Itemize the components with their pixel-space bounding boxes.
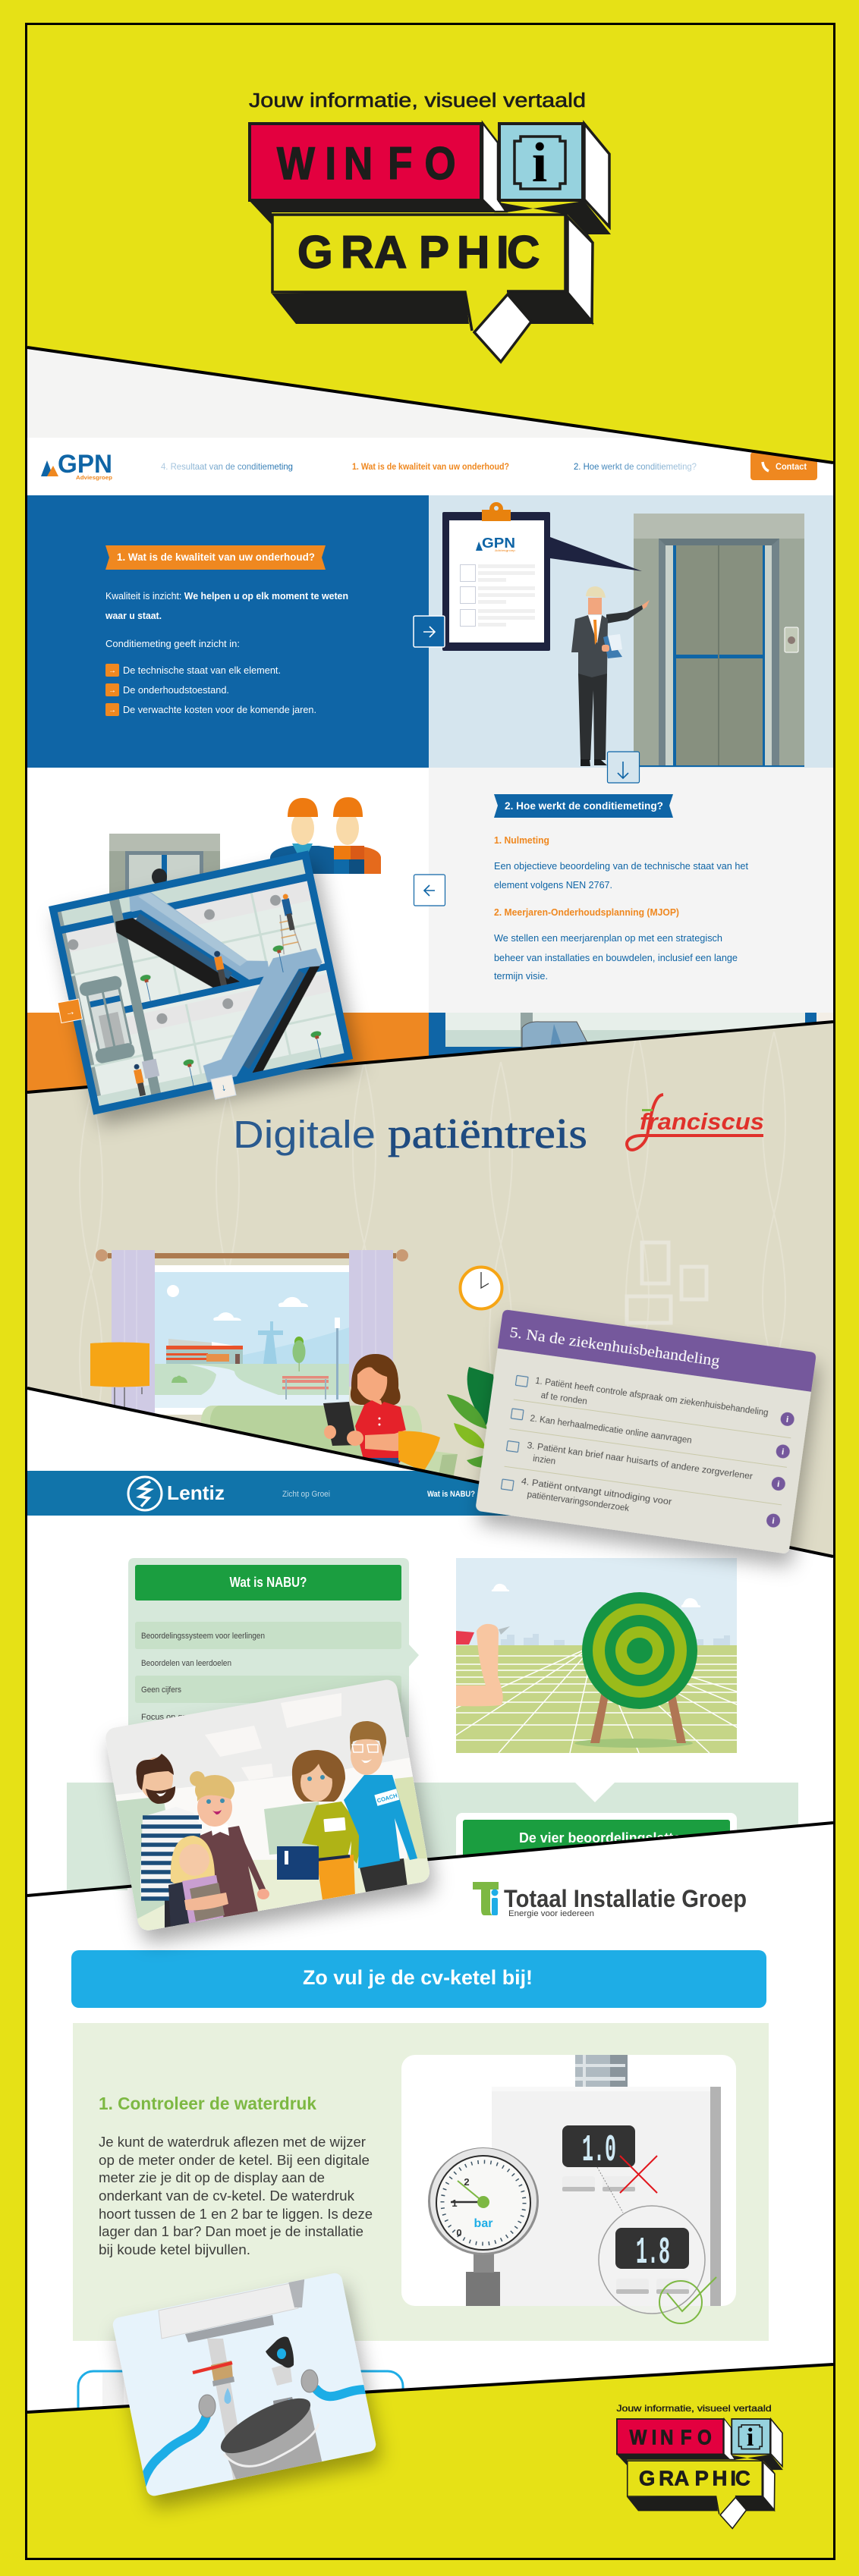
- wallpaper pattern: [80, 1032, 785, 1441]
- small lift: [109, 834, 220, 894]
- target: [582, 1592, 697, 1743]
- escalator one: [109, 870, 271, 1005]
- intro text: Kwaliteit is inzicht: We helpen u op elk moment te weten: [105, 591, 348, 602]
- potted plants: [140, 941, 326, 1092]
- wall clock: [460, 1267, 502, 1309]
- hallway background: [104, 1693, 448, 1942]
- arrow button: left: [414, 875, 445, 906]
- lamp post: [335, 1318, 340, 1400]
- card tab: orange arrow: →: [65, 1005, 76, 1018]
- Lentiz nav bar: Wat is NABU?: [427, 1490, 475, 1499]
- title: [237, 1119, 586, 1158]
- woman with folder: [277, 1750, 364, 1900]
- paragraph: lager dan 1 bar? Dan moet je de installatie: [99, 2224, 363, 2239]
- section: Totaal Installatie Groep: [27, 1820, 833, 2439]
- panel: hoe werkt de conditiemeting: Een objectieve beoordeling van de technische staat van het: [494, 861, 749, 872]
- pipe coupling and red mark: [193, 2361, 234, 2386]
- blond woman: [190, 1771, 269, 1919]
- Lentiz logo: Lentiz: [167, 1481, 225, 1504]
- panel: hoe werkt de conditiemeting: element volgens NEN 2767.: [494, 880, 612, 891]
- curtains and rod: [96, 1249, 408, 1417]
- step 1 text: 1. Nulmeting: [494, 835, 549, 846]
- window with view: [155, 1265, 349, 1415]
- Lentiz nav bar: Zicht op Groei: [282, 1490, 330, 1499]
- paragraph: Je kunt de waterdruk aflezen met de wijzer: [99, 2135, 366, 2150]
- list items: 2. Kan herhaalmedicatie online aanvragen: [530, 1414, 692, 1446]
- navigation bar: 1. Wat is de kwaliteit van uw onderhoud?: [352, 461, 509, 472]
- heading bar: Wat is NABU?: [229, 1575, 307, 1590]
- water drops: [225, 2388, 293, 2414]
- panel: hoe werkt de conditiemeting: [429, 768, 833, 1013]
- list items: patiëntervaringsonderzoek: [527, 1491, 630, 1513]
- clipboard with checklist: [442, 502, 642, 651]
- heading bar: [71, 1950, 766, 2008]
- hospital: [166, 1339, 243, 1364]
- lift cage: [78, 975, 137, 1065]
- title: patiëntreis: [388, 1111, 587, 1158]
- arrow button: down: [607, 752, 639, 783]
- left pipe: [207, 2339, 247, 2482]
- info badges: i: [785, 1415, 789, 1425]
- pipe: [575, 2055, 628, 2088]
- diagonal section dividers: [27, 347, 833, 2412]
- boiler underside: [159, 2272, 305, 2342]
- red cross: [620, 2156, 657, 2193]
- logo: winfo graphic: i: [532, 132, 547, 194]
- pressure gauge: 0: [456, 2227, 462, 2238]
- section: winfographic header: [27, 25, 833, 463]
- footer logo: winfo graphic: Jouw informatie, visueel vertaald: [616, 2404, 772, 2414]
- coach badge: COACH: [376, 1792, 398, 1805]
- boiler body: [492, 2087, 721, 2306]
- section: GPN website: [27, 347, 833, 1096]
- panel: hoe werkt de conditiemeting: beheer van installaties en bouwdelen, inclusief een lange: [494, 953, 738, 963]
- building interior strip: [429, 1013, 833, 1056]
- woman with tablet: [323, 1354, 440, 1472]
- contact button: [750, 452, 817, 480]
- boiler illustration: [401, 2055, 736, 2323]
- magnified display: 1.8: [636, 2232, 670, 2275]
- tagline: Jouw informatie, visueel vertaald: [249, 90, 586, 112]
- ribbon heading: 1. Wat is de kwaliteit van uw onderhoud?: [117, 551, 315, 563]
- list rows: Beoordelingssysteem voor leerlingen: [141, 1632, 265, 1641]
- Lentiz logo: [128, 1477, 225, 1510]
- pressure gauge: bar: [474, 2217, 492, 2230]
- tilted card: bucket and hoses: [99, 2260, 387, 2511]
- bullet list: →: [109, 667, 116, 675]
- card tab: down arrow: [211, 1075, 236, 1099]
- step heading: 1. Controleer de waterdruk: [99, 2094, 316, 2113]
- arrow button: right: [414, 616, 445, 647]
- ribbon heading: [105, 545, 326, 570]
- lower green band: [67, 1783, 798, 1904]
- valve: [266, 2337, 311, 2473]
- list items: [519, 1377, 769, 1531]
- panel: controleer de waterdruk: [73, 2023, 769, 2341]
- plant: [447, 1367, 494, 1468]
- pressure gauge: 2: [464, 2176, 470, 2188]
- Franciscus logo: franciscus: [640, 1108, 764, 1135]
- bullet list: →: [109, 706, 116, 715]
- panel: hoe werkt de conditiemeting: termijn visie.: [494, 971, 548, 982]
- coach badge: [374, 1789, 399, 1806]
- section: Lentiz NABU: [27, 1388, 859, 1919]
- ladder and workers: [104, 894, 324, 1096]
- step 2 text: 2. Meerjaren-Onderhoudsplanning (MJOP): [494, 907, 679, 918]
- panel: blue kwaliteit text: waar u staat.: [105, 611, 162, 621]
- card tab: down arrow: ↓: [220, 1081, 227, 1093]
- paragraph: op de meter onder de ketel. Bij een digitale: [99, 2153, 370, 2168]
- footer logo: winfo graphic: [616, 2404, 783, 2528]
- contact button: Contact: [776, 461, 807, 472]
- panel: wat is NABU: [128, 1558, 419, 1737]
- tall man in blue: [344, 1721, 417, 1895]
- bullet list: De verwachte kosten voor de komende jaren.: [123, 705, 316, 715]
- upper display: 1.0: [582, 2129, 616, 2172]
- upper display: [562, 2125, 635, 2191]
- title: Digitale: [233, 1113, 376, 1156]
- GPN logo: [41, 454, 112, 481]
- wall vents: [67, 894, 301, 1040]
- section: footer yellow band: [27, 2364, 833, 2558]
- list rows: [135, 1622, 401, 1722]
- bench: [282, 1376, 329, 1400]
- lower green band: De vier beoordelingsletters: [519, 1830, 694, 1846]
- list items: 1. Patiënt heeft controle afspraak om ziekenhuisbehandeling: [535, 1377, 769, 1418]
- arm with dart: [456, 1624, 510, 1706]
- paragraph: meter zie je dit op de display aan de: [99, 2170, 325, 2185]
- pressure gauge: 1: [452, 2197, 458, 2209]
- bucket: [214, 2388, 325, 2496]
- paragraph: bij koude ketel bijvullen.: [99, 2242, 250, 2257]
- list rows: Geen cijfers: [141, 1685, 181, 1695]
- list items: af te ronden: [540, 1391, 587, 1406]
- card title: 5. Na de ziekenhuisbehandeling: [508, 1324, 721, 1370]
- info badges: [766, 1412, 795, 1528]
- bullet list: [105, 664, 316, 716]
- paragraph: [99, 2135, 373, 2257]
- section: Franciscus digitale patientreis: [27, 1016, 833, 1563]
- logo: winfo graphic: GRAPHIC: [297, 227, 540, 278]
- clipboard with checklist: Adviesgroep: [495, 548, 516, 552]
- bullet list: →: [109, 686, 116, 695]
- lift: [634, 514, 804, 767]
- escalator two: [184, 947, 341, 1082]
- picture frames: [627, 1242, 706, 1323]
- info badges: i: [781, 1447, 785, 1457]
- footer logo: winfo graphic: WINFO: [629, 2425, 712, 2449]
- card tab: orange arrow: [58, 999, 82, 1023]
- list items: 4. Patiënt ontvangt uitnodiging voor: [521, 1478, 672, 1507]
- info badges: i: [772, 1516, 775, 1526]
- tilted card: NABU people: [76, 1661, 455, 1949]
- tilted card: na de ziekenhuisbehandeling: [475, 1309, 817, 1554]
- paragraph: hoort tussen de 1 en 2 bar te liggen. Is deze: [99, 2207, 373, 2222]
- panel: workers illustration: [27, 768, 429, 1013]
- paragraph: onderkant van de cv-ketel. De waterdruk: [99, 2188, 355, 2204]
- pressure gauge: [428, 2147, 539, 2306]
- clipboard with checklist: GPN: [482, 536, 515, 551]
- list icons: [501, 1375, 528, 1491]
- bullet list: De onderhoudstoestand.: [123, 685, 229, 696]
- sofa: [201, 1406, 458, 1476]
- panel: lift inspection illustration: [414, 495, 833, 768]
- Lentiz nav bar: [27, 1471, 833, 1516]
- info badges: i: [776, 1480, 780, 1489]
- windmill: [258, 1321, 283, 1364]
- child: [168, 1836, 228, 1930]
- GPN logo: Adviesgroep: [76, 474, 112, 481]
- bearded man: [136, 1754, 202, 1930]
- inspector figure: [571, 586, 650, 766]
- list items: 3. Patiënt kan brief naar huisarts of andere zorgverlener: [527, 1441, 754, 1481]
- floor lamp: [90, 1343, 149, 1407]
- list items: inzien: [532, 1454, 556, 1466]
- panel: blue kwaliteit text: [27, 495, 429, 768]
- ribbon heading: [494, 794, 673, 818]
- workers: [270, 797, 381, 874]
- heading bar: Zo vul je de cv-ketel bij!: [303, 1966, 533, 1989]
- orange strip: [27, 1013, 429, 1096]
- water hoses: [139, 2388, 366, 2496]
- footer logo: winfo graphic: GRAPHIC: [639, 2466, 750, 2490]
- Franciscus logo: [627, 1095, 764, 1150]
- GPN logo: GPN: [58, 450, 112, 479]
- tree: [293, 1337, 305, 1371]
- heading bar: [135, 1565, 401, 1601]
- nav links: 4. Resultaat van de conditiemeting: [161, 461, 293, 472]
- panel: hoe werkt de conditiemeting: We stellen een meerjarenplan op met een strategisch: [494, 933, 722, 944]
- navigation bar: 2. Hoe werkt de conditiemeting?: [574, 461, 697, 472]
- list rows: Beoordelen van leerdoelen: [141, 1659, 231, 1668]
- TI logo: Totaal Installatie Groep: [504, 1885, 747, 1912]
- tilted card: escalators: [49, 850, 353, 1115]
- blue outlined panel below: [78, 2371, 403, 2439]
- green check: [659, 2277, 716, 2323]
- magnified display: [599, 2206, 705, 2314]
- navigation bar: [27, 438, 833, 495]
- ribbon heading: 2. Hoe werkt de conditiemeting?: [505, 800, 663, 812]
- list rows: Focus op groei: [141, 1713, 197, 1722]
- target illustration: [357, 1558, 859, 1753]
- logo: winfo graphic: WINFO: [277, 138, 456, 189]
- TI logo: [473, 1882, 747, 1918]
- hose knobs: [199, 2370, 318, 2417]
- footer logo: winfo graphic: i: [747, 2424, 754, 2452]
- bullet list: De technische staat van elk element.: [123, 665, 281, 676]
- logo: winfo graphic: [248, 123, 611, 362]
- panel: blue kwaliteit text: Conditiemeting geeft inzicht in:: [105, 639, 240, 649]
- TI logo: Energie voor iedereen: [508, 1909, 594, 1918]
